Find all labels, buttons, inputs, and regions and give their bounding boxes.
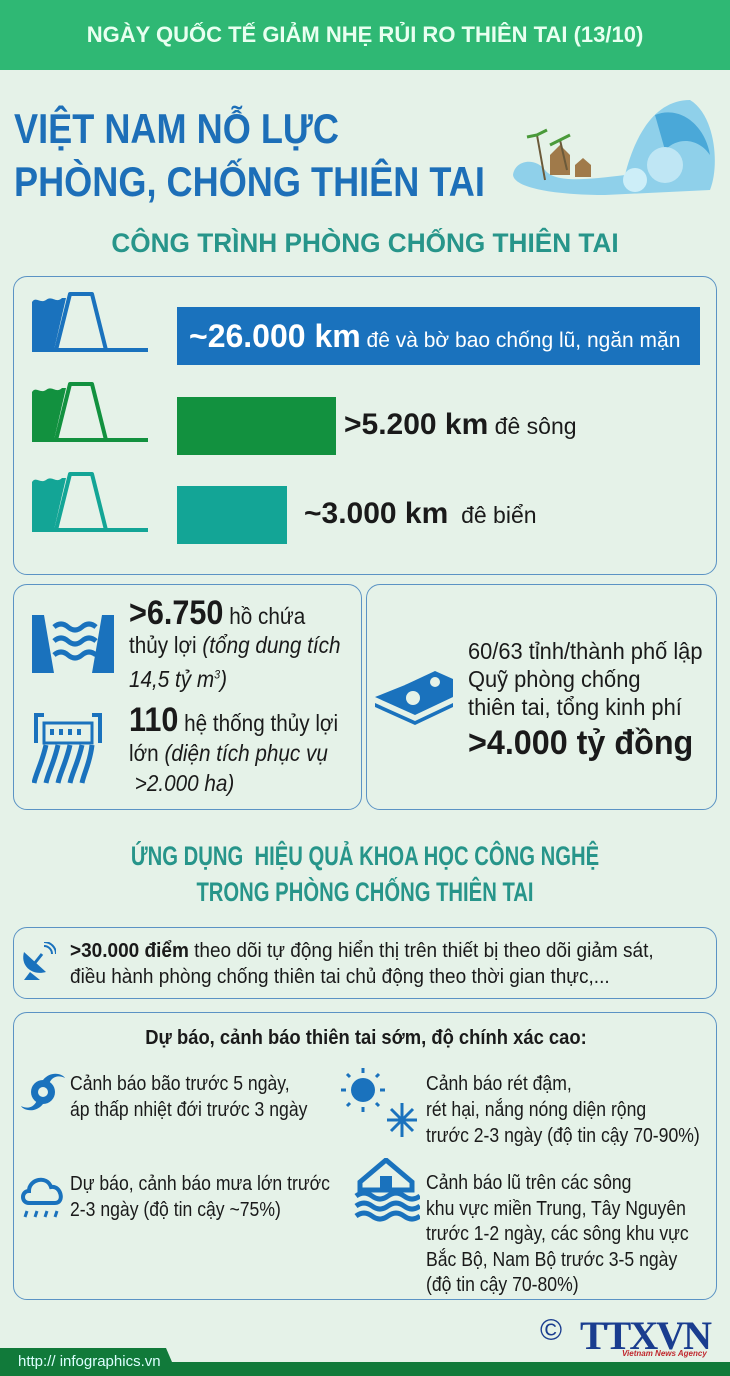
icon: satellite dish bbox=[23, 942, 56, 980]
panel: forecasting bbox=[13, 1012, 717, 1300]
text: fund: >4.000 tỷ đồng bbox=[468, 724, 693, 762]
text: monitoring: >30.000 điểm theo dõi tự động hiển thị trên thiết bị theo dõi giảm sát, bbox=[70, 940, 654, 962]
label: 5200 km: >5.200 km đê sông bbox=[344, 408, 577, 441]
panel: monitoring points bbox=[13, 927, 717, 999]
text: fund: 60/63 tỉnh/thành phố lập bbox=[468, 638, 702, 664]
icon: dike green bbox=[32, 382, 148, 442]
label: 3000 km: ~3.000 km đê biển bbox=[304, 497, 537, 530]
bar: 3000 km bbox=[177, 486, 287, 544]
text: cold heat warning: trước 2-3 ngày (độ tin cậy 70-90%) bbox=[426, 1125, 700, 1147]
subheading: Dự báo, cảnh báo thiên tai sớm, độ chính xác cao: bbox=[145, 1027, 587, 1049]
header banner: NGÀY QUỐC TẾ GIẢM NHẸ RỦI RO THIÊN TAI (13/10) bbox=[87, 22, 643, 47]
text: flood warning: khu vực miền Trung, Tây Nguyên bbox=[426, 1198, 686, 1220]
text: flood warning: trước 1-2 ngày, các sông khu vực bbox=[426, 1223, 689, 1245]
icon: dike blue bbox=[32, 292, 148, 352]
text: cold heat warning: rét hại, nắng nóng diện rộng bbox=[426, 1099, 646, 1121]
text: rain warning: Dự báo, cảnh báo mưa lớn trước bbox=[70, 1173, 330, 1195]
text: monitoring bbox=[70, 940, 654, 988]
text: 110 systems bbox=[129, 701, 338, 796]
bar: 5200 km bbox=[177, 397, 336, 455]
text: 6750 reservoirs: >6.750 hồ chứa bbox=[129, 594, 305, 632]
main title: PHÒNG, CHỐNG THIÊN TAI bbox=[14, 158, 485, 205]
text: flood warning: (độ tin cậy 70-80%) bbox=[426, 1274, 579, 1296]
footer band bbox=[0, 1362, 730, 1376]
section heading: technology: ỨNG DỤNG HIỆU QUẢ KHOA HỌC CÔNG NGHỆ bbox=[131, 841, 599, 871]
text: monitoring: điều hành phòng chống thiên tai chủ động theo thời gian thực,... bbox=[70, 966, 610, 988]
logo: TTXVN: © bbox=[540, 1314, 562, 1347]
icon: money bbox=[375, 671, 453, 725]
panel: disaster fund bbox=[366, 584, 717, 810]
logo: TTXVN: Vietnam News Agency bbox=[622, 1349, 707, 1358]
text: cold heat warning: Cảnh báo rét đậm, bbox=[426, 1073, 572, 1095]
text: flood warning: Bắc Bộ, Nam Bộ trước 3-5 ngày bbox=[426, 1248, 677, 1270]
section heading: technology bbox=[131, 840, 599, 907]
section heading: works: CÔNG TRÌNH PHÒNG CHỐNG THIÊN TAI bbox=[111, 228, 619, 258]
main title: VIỆT NAM NỖ LỰC bbox=[14, 105, 339, 152]
text: fund: Quỹ phòng chống bbox=[468, 666, 641, 692]
text: storm warning bbox=[70, 1073, 308, 1121]
icon: irrigation gate bbox=[32, 713, 102, 784]
text: 110 systems: >2.000 ha) bbox=[135, 770, 234, 796]
section heading: technology: TRONG PHÒNG CHỐNG THIÊN TAI bbox=[196, 877, 534, 907]
text: flood warning: Cảnh báo lũ trên các sông bbox=[426, 1172, 631, 1194]
bar: 26000 km bbox=[177, 307, 700, 365]
panel: reservoirs and irrigation bbox=[13, 584, 362, 810]
footer url tab bbox=[0, 1348, 172, 1369]
bar: 26000 km: ~26.000 km đê và bờ bao chống lũ, ngăn mặn bbox=[189, 318, 680, 354]
text: storm warning: áp thấp nhiệt đới trước 3 ngày bbox=[70, 1099, 307, 1121]
footer url tab: http:// infographics.vn bbox=[18, 1353, 161, 1370]
text: fund bbox=[468, 638, 702, 762]
text: flood warning bbox=[426, 1172, 689, 1296]
text: rain warning: 2-3 ngày (độ tin cậy ~75%) bbox=[70, 1199, 281, 1221]
text: storm warning: Cảnh báo bão trước 5 ngày, bbox=[70, 1073, 290, 1095]
icon: flood house bbox=[354, 1158, 420, 1222]
icon: rain cloud bbox=[21, 1178, 63, 1218]
text: 6750 reservoirs: 14,5 tỷ m3) bbox=[129, 666, 227, 692]
text: 6750 reservoirs bbox=[129, 594, 341, 692]
icon: dike teal bbox=[32, 472, 148, 532]
text: rain warning bbox=[70, 1173, 330, 1221]
logo: TTXVN: TTXVN bbox=[580, 1313, 710, 1358]
panel: dikes bbox=[13, 276, 717, 575]
icon: storm bbox=[21, 1074, 65, 1110]
header banner bbox=[0, 0, 730, 70]
icon: sun and snow bbox=[341, 1068, 417, 1137]
text: 110 systems: lớn (diện tích phục vụ bbox=[129, 740, 328, 766]
text: 6750 reservoirs: thủy lợi (tổng dung tích bbox=[129, 632, 341, 658]
main title bbox=[14, 105, 485, 205]
text: cold heat warning bbox=[426, 1073, 700, 1147]
text: fund: thiên tai, tổng kinh phí bbox=[468, 694, 682, 720]
icon: reservoir bbox=[32, 615, 114, 673]
illustration: wave and huts bbox=[513, 100, 715, 195]
text: 110 systems: 110 hệ thống thủy lợi bbox=[129, 701, 338, 739]
